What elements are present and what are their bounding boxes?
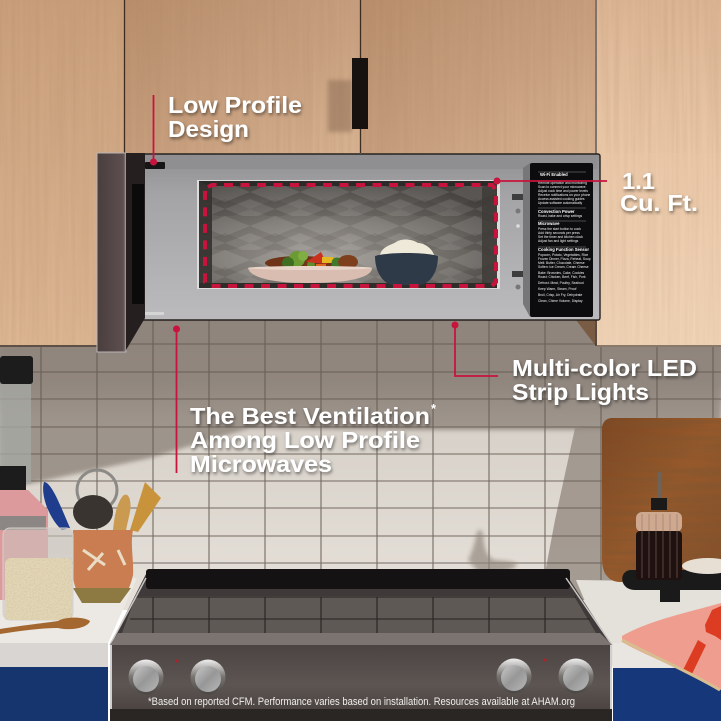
wood cabinets (0, 0, 721, 347)
callout: capacity (494, 168, 698, 216)
control panel: Roast, bake and crisp settings (538, 214, 583, 218)
callout: best ventilation: * (431, 401, 437, 416)
callout: best ventilation: Microwaves (190, 451, 332, 477)
blender (0, 356, 48, 600)
wall shadow above light pool (0, 320, 721, 490)
door latches (512, 194, 523, 290)
callout: low profile design (150, 92, 302, 166)
control panel (523, 163, 593, 317)
control panel: Soften: Ice Cream, Cream Cheese (538, 265, 589, 269)
control panel front (110, 645, 612, 711)
control panel: Receive notifications on your phone (538, 193, 590, 197)
control panel: Add thirty seconds per press (538, 231, 580, 235)
utensil crock (43, 470, 161, 603)
cabinet handle (352, 58, 368, 129)
food plate (248, 251, 372, 283)
control panel: Convection Power (538, 209, 575, 214)
control panel: Defrost: Meat, Poultry, Seafood (538, 281, 584, 285)
callout: best ventilation: The Best Ventilation (190, 403, 430, 429)
control panel: Adjust fan and light settings (538, 239, 579, 243)
callout: capacity: 1.1 (622, 168, 655, 194)
cooktop glass (110, 574, 612, 645)
microwave body (125, 154, 600, 320)
glass jar of rice (3, 528, 73, 620)
rice bowl (375, 239, 438, 285)
cutting board (602, 418, 721, 582)
control panel: Melt: Butter, Chocolate, Cheese (538, 261, 585, 265)
dish towel (622, 603, 721, 690)
callout: LED strip lights: Multi-color LED (512, 355, 697, 381)
callout: best ventilation (173, 326, 437, 477)
control panel: Wi-Fi Enabled (540, 172, 568, 177)
control panel: Microwave (538, 221, 560, 226)
knob left 1 (128, 660, 164, 694)
callout: LED strip lights: Strip Lights (512, 379, 649, 405)
control panel: Press the start button to cook (538, 227, 581, 231)
control panel: Clean, Chime Volume, Display (538, 299, 583, 303)
callout: best ventilation: Among Low Profile (190, 427, 420, 453)
control panel: Roast: Chicken, Beef, Fish, Pork (538, 275, 586, 279)
open door (97, 153, 165, 352)
oven window (197, 180, 500, 289)
control panel: Bake: Brownies, Cake, Cookies (538, 271, 585, 275)
control panel: Keep Warm, Steam, Proof (538, 287, 576, 291)
control panel: Adjust cook time and power levels (538, 189, 588, 193)
callout: LED strip lights (452, 322, 697, 405)
callout: capacity: Cu. Ft. (620, 190, 698, 216)
control panel: Frozen Dinner, Pizza, Reheat, Soup (538, 257, 591, 261)
left counter and cabinet (0, 356, 161, 721)
wall shadow right of light pool (540, 420, 721, 600)
knob right 1 (496, 658, 532, 694)
control panel: Access assisted cooking guides (538, 197, 585, 201)
control panel: Set the timer and kitchen clock (538, 235, 583, 239)
callout: low profile design: Low Profile (168, 92, 302, 118)
wooden spoon (0, 618, 90, 634)
callout: low profile design: Design (168, 116, 249, 142)
microwave (97, 153, 600, 352)
control panel: Popcorn, Potato, Vegetables, Rice (538, 253, 588, 257)
electric range (110, 569, 612, 721)
control panel: Broil, Crisp, Air Fry, Dehydrate (538, 293, 582, 297)
right counter and cabinet (576, 418, 721, 721)
knob left 2 (190, 660, 226, 694)
control panel: Remote operation and monitoring (538, 181, 587, 185)
control panel: Scan to connect your microwave (538, 185, 586, 189)
control panel: Update software automatically (538, 201, 583, 205)
kitchen backdrop: tile backsplash (0, 300, 721, 610)
knob right 2 (558, 658, 594, 694)
capacity dashes (205, 185, 496, 286)
control panel: Cooking Function Sensor (538, 247, 589, 252)
footnote: *Based on reported CFM. Performance varies based on installation. Resources available at AHAM.org (148, 696, 575, 708)
stand and bottle (622, 472, 721, 602)
